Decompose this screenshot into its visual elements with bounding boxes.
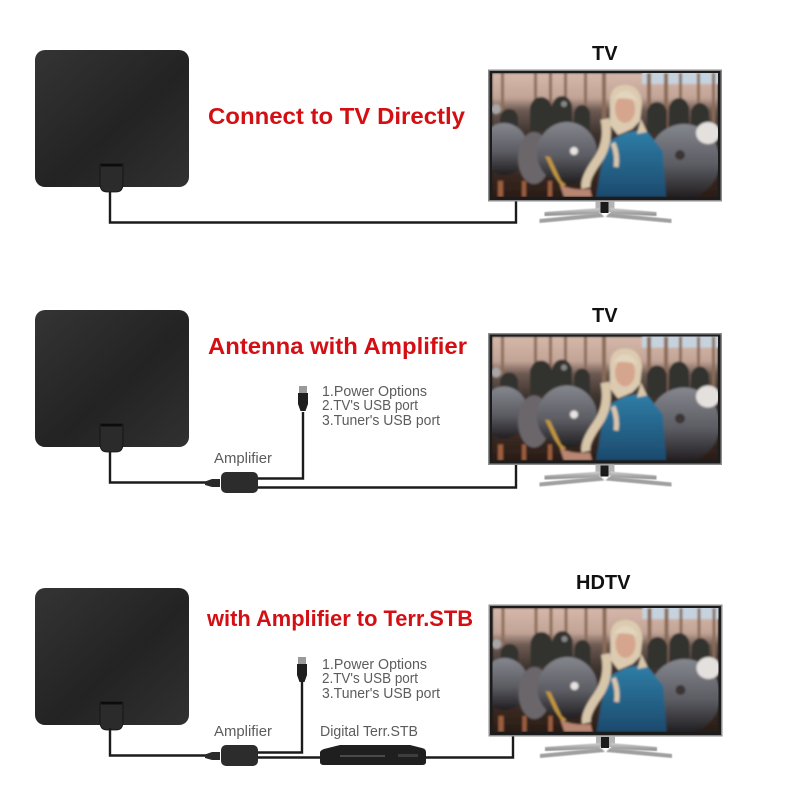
text: power options: 3.Tuner's USB port [322, 413, 440, 429]
label: Amplifier: Amplifier [214, 451, 272, 467]
panel: antenna with amplifier [35, 305, 722, 493]
heading: with Amplifier to Terr.STB: with Amplifier to Terr.STB [206, 606, 473, 631]
heading: Antenna with Amplifier: Antenna with Amplifier [208, 333, 467, 359]
text: power options: 2.TV's USB port [322, 671, 418, 687]
label: Digital Terr.STB: Digital Terr.STB [320, 724, 418, 740]
label: HDTV: HDTV [576, 572, 631, 594]
text: power options: 2.TV's USB port [322, 398, 418, 414]
label: Amplifier: Amplifier [214, 724, 272, 740]
icon: television [480, 70, 722, 223]
panel: direct connection [35, 43, 722, 223]
icon: amplifier [205, 745, 258, 766]
cable: antenna to TV [110, 192, 516, 222]
panel: amplifier to Terr.STB [35, 572, 722, 766]
icon: USB plug [298, 386, 308, 411]
text: power options: 3.Tuner's USB port [322, 686, 440, 702]
icon: amplifier [205, 472, 258, 493]
text: power options: 1.Power Options [322, 657, 427, 673]
text: power options: 1.Power Options [322, 384, 427, 400]
icon: television [480, 333, 722, 486]
text: power options [322, 657, 440, 702]
icon: flat antenna [35, 310, 189, 452]
label: TV: TV [592, 305, 618, 327]
cables: antenna, USB and TV [110, 412, 516, 488]
label: TV: TV [592, 43, 618, 65]
icon: flat antenna [35, 50, 189, 192]
text: power options [322, 384, 440, 429]
icon: flat antenna [35, 588, 189, 730]
icon: television [480, 604, 722, 758]
cables: antenna, USB, STB and TV [110, 680, 513, 758]
heading: Connect to TV Directly: Connect to TV Directly [208, 103, 465, 129]
icon: digital set-top box [320, 745, 426, 765]
icon: USB plug [297, 657, 307, 682]
